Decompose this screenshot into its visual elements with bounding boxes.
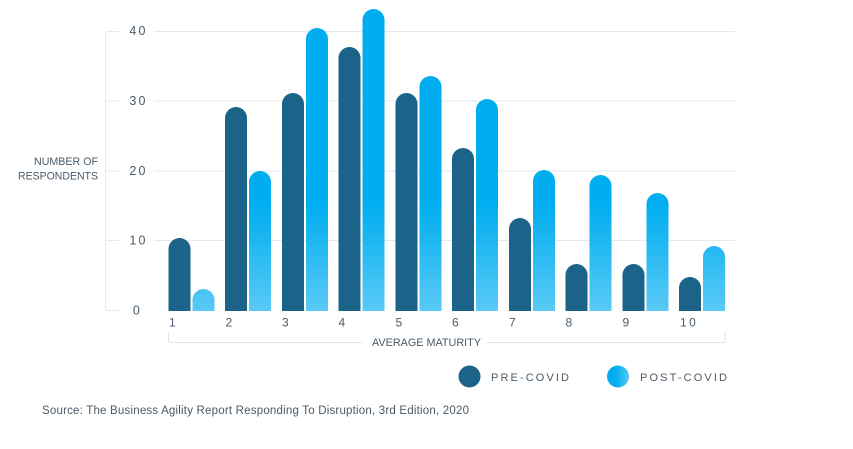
bars: post-covid <box>192 9 725 311</box>
y axis tick labels: 0 <box>133 304 142 318</box>
x axis tick labels: 9 <box>622 316 630 330</box>
x axis tick labels <box>169 316 698 330</box>
legend: pre-covid <box>458 366 569 388</box>
y axis title <box>18 156 98 182</box>
x axis bracket <box>168 332 725 342</box>
x axis tick labels: 1 <box>169 316 176 330</box>
legend: post-covid: POST-COVID <box>640 372 727 384</box>
x axis tick labels: 10 <box>680 316 698 330</box>
x axis title: AVERAGE MATURITY <box>372 337 482 349</box>
y axis tick labels: 20 <box>129 164 148 178</box>
legend: post-covid <box>607 366 727 388</box>
y axis tick labels: 40 <box>129 24 148 38</box>
x axis tick labels: 4 <box>338 316 346 330</box>
x axis tick labels: 2 <box>226 316 232 330</box>
y axis with gridlines <box>106 32 735 310</box>
y axis tick labels: 10 <box>129 234 148 248</box>
y axis title: NUMBER OF <box>34 156 98 168</box>
x axis tick labels: 3 <box>282 316 289 330</box>
y axis title: RESPONDENTS <box>18 170 98 182</box>
x axis tick labels: 6 <box>452 316 459 330</box>
x axis tick labels: 8 <box>566 316 572 330</box>
source note: Source: The Business Agility Report Responding To Disruption, 3rd Edition, 2020 <box>42 405 469 417</box>
x axis tick labels: 7 <box>509 316 516 330</box>
legend: pre-covid: PRE-COVID <box>491 372 569 384</box>
y axis tick labels <box>129 24 148 318</box>
y axis tick labels: 30 <box>129 94 148 108</box>
bars: pre-covid <box>168 47 701 311</box>
x axis tick labels: 5 <box>396 316 402 330</box>
